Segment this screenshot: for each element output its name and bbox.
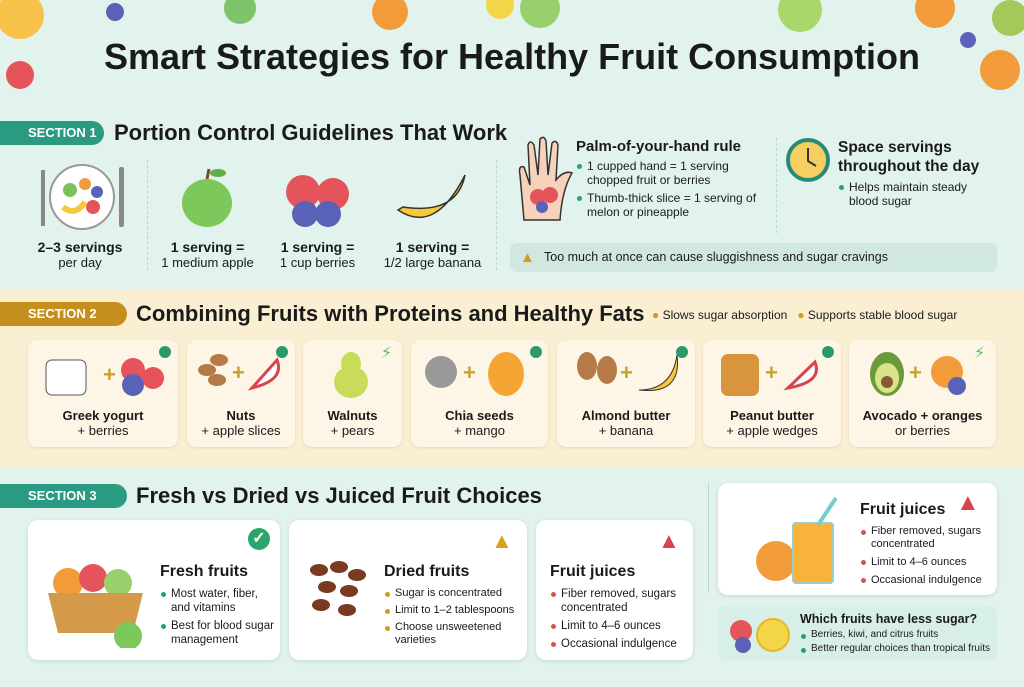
card: fruit juices: Limit to 4–6 ounces [561, 620, 661, 632]
block: palm rule [576, 138, 756, 219]
section 1 label: SECTION 1 [28, 125, 97, 140]
card: fruit juices large: Fruit juices [860, 501, 945, 518]
card: yogurt: Greek yogurt [63, 408, 143, 423]
section 1 label [0, 121, 104, 145]
callout: warning [510, 243, 997, 272]
text: banana serving [384, 239, 482, 270]
card: nuts: + [232, 360, 245, 385]
card: less sugar: Which fruits have less sugar? [800, 612, 977, 626]
text: apple serving: 1 medium apple [161, 255, 254, 270]
icon: clock [786, 138, 830, 182]
card: fresh fruits: Fresh fruits [160, 563, 248, 580]
icon: apple [182, 168, 232, 227]
section 3 label: SECTION 3 [28, 488, 97, 503]
card: nuts [187, 340, 295, 447]
card: nuts: + apple slices [201, 423, 281, 438]
card: fruit juices: Occasional indulgence [561, 638, 677, 650]
text: banana serving: 1/2 large banana [384, 255, 481, 270]
card: fruit juices [536, 520, 693, 660]
block: palm rule: 1 cupped hand = 1 serving chopped fruit or berries [587, 159, 729, 187]
text: servings per day [38, 239, 122, 270]
card: dried fruits: Dried fruits [384, 563, 469, 580]
card: avocado: + [909, 360, 922, 385]
card: avocado [849, 340, 996, 447]
card: chia: Chia seeds [445, 408, 514, 423]
panel: section 2 [0, 290, 1024, 467]
section 3 label [0, 484, 127, 508]
card: yogurt: + [103, 362, 116, 387]
card: dried fruits: Choose unsweetened varieties [395, 621, 501, 646]
icon: banana [396, 174, 466, 218]
icon: berries [286, 175, 349, 227]
card: dried fruits: Sugar is concentrated [395, 587, 502, 599]
section 2 label: SECTION 2 [28, 306, 97, 321]
section 3 heading: Fresh vs Dried vs Juiced Fruit Choices [136, 483, 542, 508]
card: avocado: ⚡ [974, 343, 985, 362]
block: palm rule: Palm-of-your-hand rule [576, 138, 741, 155]
card: fruit juices: ▲ [658, 528, 680, 553]
callout: warning: Too much at once can cause sluggishness and sugar cravings [544, 250, 888, 264]
block: space servings: Helps maintain steady blood sugar [849, 180, 967, 208]
card: pears: Walnuts [327, 408, 378, 423]
card: pears: + pears [331, 423, 374, 438]
card: chia: + mango [454, 423, 505, 438]
card: fruit juices large: ▲ [956, 489, 980, 516]
card: fruit juices: Fiber removed, sugars concentrated [561, 588, 676, 614]
card: less sugar [718, 605, 997, 660]
card: fruit juices: Fruit juices [550, 563, 635, 580]
icon: plate [41, 164, 124, 230]
text: servings per day: 2–3 servings [38, 239, 122, 255]
legend: ● Slows sugar absorption ● Supports stable blood sugar [652, 308, 957, 322]
text: berries serving: 1 serving = [281, 239, 354, 255]
card: almond butter [557, 340, 695, 447]
card: yogurt: + berries [78, 423, 128, 438]
decorative top fruit border [0, 0, 1024, 90]
card: peanut butter: Peanut butter [730, 408, 814, 423]
card: peanut butter [703, 340, 841, 447]
card: almond butter: + [620, 360, 633, 385]
card: fresh fruits [28, 520, 280, 660]
card: nuts: Nuts [227, 408, 255, 423]
callout: warning: ▲ [520, 249, 535, 266]
card: dried fruits: Limit to 1–2 tablespoons [395, 604, 514, 616]
card: less sugar: Better regular choices than tropical fruits [811, 643, 990, 654]
panel: section 3 [0, 483, 998, 662]
card: chia [411, 340, 548, 447]
block: space servings [838, 139, 980, 208]
card: fresh fruits: ✓ [252, 530, 266, 547]
title: Smart Strategies for Healthy Fruit Consumption [104, 36, 920, 77]
block: space servings: Space servings throughout the day [838, 139, 979, 175]
card: avocado: or berries [895, 423, 950, 438]
card: almond butter: Almond butter [582, 408, 670, 423]
card: pears [303, 340, 402, 447]
text: apple serving: 1 serving = [171, 239, 244, 255]
card: pears: ⚡ [381, 343, 392, 362]
text: banana serving: 1 serving = [396, 239, 469, 255]
card: less sugar: Berries, kiwi, and citrus fruits [811, 629, 938, 640]
card: avocado: Avocado + oranges [863, 408, 982, 423]
text: apple serving [161, 239, 254, 270]
section 2 label [0, 302, 127, 326]
card: fresh fruits: Most water, fiber, and vitamins [171, 588, 258, 614]
text: servings per day: per day [58, 255, 102, 270]
card: peanut butter: + apple wedges [726, 423, 818, 438]
card: yogurt [28, 340, 178, 447]
text: berries serving [280, 239, 355, 270]
section 1 heading: Portion Control Guidelines That Work [114, 120, 507, 145]
card: fresh fruits: Best for blood sugar management [171, 620, 274, 646]
icon: hand [518, 136, 573, 221]
card: peanut butter: + [765, 360, 778, 385]
text: berries serving: 1 cup berries [280, 255, 355, 270]
card: dried fruits [289, 520, 527, 660]
card: fruit juices large [718, 483, 997, 595]
card: chia: + [463, 360, 476, 385]
card: dried fruits: ▲ [491, 528, 513, 553]
card: almond butter: + banana [599, 423, 653, 438]
card: fruit juices large: Fiber removed, sugars concentrated [871, 525, 981, 550]
section 2 heading: Combining Fruits with Proteins and Healthy Fats [136, 301, 644, 326]
panel: section 1 [0, 120, 997, 272]
block: palm rule: Thumb-thick slice = 1 serving of melon or pineapple [587, 191, 756, 219]
card: fruit juices large: Occasional indulgence [871, 574, 982, 586]
card: fruit juices large: Limit to 4–6 ounces [871, 556, 966, 568]
